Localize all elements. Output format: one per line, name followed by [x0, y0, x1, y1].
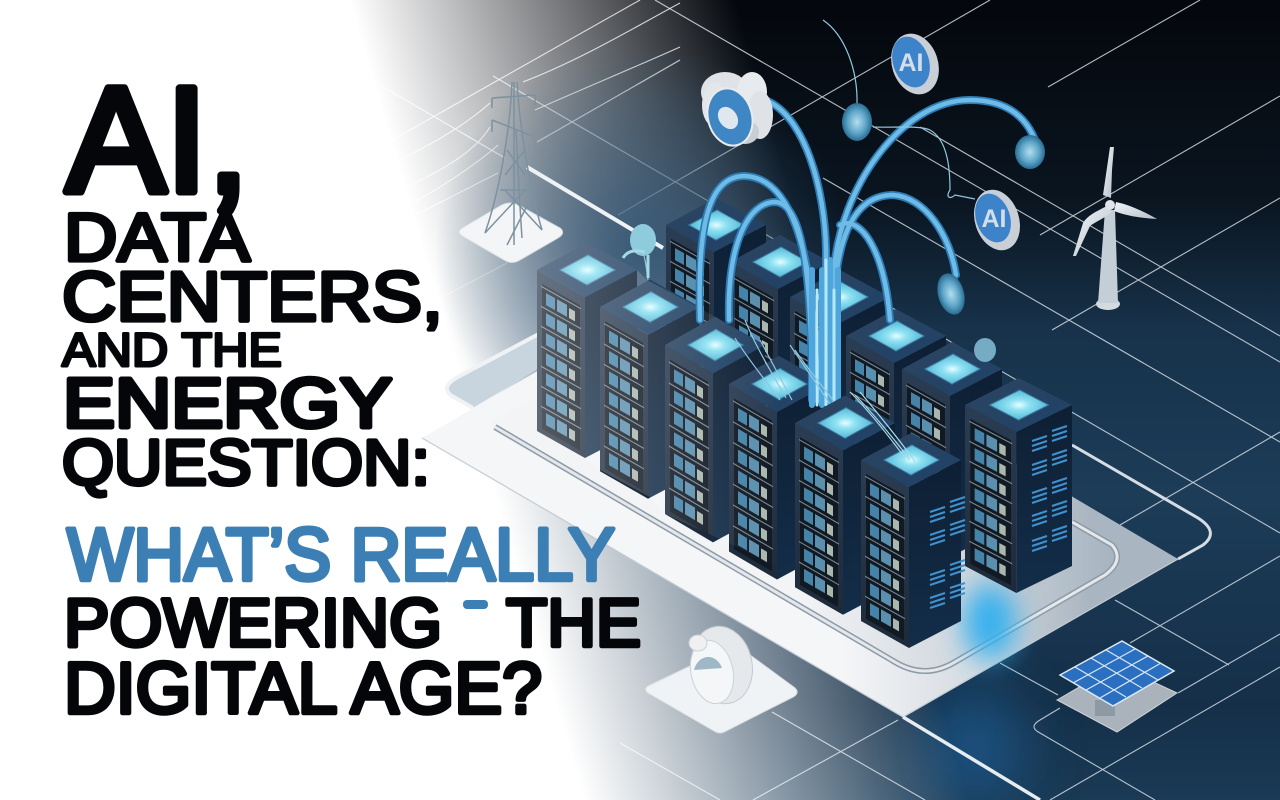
power lines	[380, 0, 680, 233]
device on pad	[646, 621, 797, 733]
server rack: back row 4	[846, 309, 946, 524]
title line: DATA: DATA	[64, 200, 251, 276]
rounded rim: upper-right	[1072, 445, 1210, 559]
AI badge: lower: AI	[982, 205, 1006, 233]
transmission edge line	[527, 167, 663, 248]
cables into front rack	[850, 392, 915, 462]
title line: CENTERS,: CENTERS,	[62, 258, 443, 336]
server rack: front row 2	[600, 279, 700, 499]
server rack: back row 6 with vents	[965, 378, 1072, 593]
raised tray	[491, 385, 1117, 671]
blue dash	[463, 600, 488, 609]
glass orb connectors	[623, 103, 1045, 362]
thick floor line	[903, 717, 1040, 800]
server rack: back row 1	[666, 198, 766, 413]
server rack: front row 3	[665, 317, 765, 542]
AI badge: upper: AI	[898, 49, 924, 77]
server rack: back row 5	[902, 342, 1002, 557]
thin cables	[640, 20, 975, 420]
mid blue tone	[435, 45, 845, 455]
solar panel	[1057, 641, 1177, 732]
title line: AND THE: AND THE	[62, 323, 282, 376]
title line: AI,: AI,	[66, 56, 249, 224]
AI badge: lower	[966, 184, 1028, 256]
server rack: front row 1	[537, 243, 637, 458]
subtitle line: DIGITAL AGE?: DIGITAL AGE?	[64, 649, 542, 729]
title	[62, 56, 641, 729]
rounded rim: left corner	[447, 320, 565, 408]
grid lines	[437, 0, 1280, 800]
server rack: back row 2	[730, 235, 830, 450]
server rack: back row 3	[790, 270, 890, 485]
blue tray glow	[964, 584, 1016, 660]
fibre tube bundle	[700, 100, 1035, 405]
cloud connector icon	[701, 72, 773, 151]
subtitle line: WHAT'S REALLY: WHAT’S REALLY	[67, 513, 615, 596]
title line: QUESTION:: QUESTION:	[62, 426, 430, 498]
plate lower edges	[422, 438, 1178, 717]
AI badge: upper	[884, 27, 946, 101]
pale wash over left racks	[537, 243, 780, 568]
white floor plate	[422, 277, 1178, 717]
subtitle line: POWERING: POWERING	[64, 585, 442, 661]
dark blue floor glow	[925, 690, 1025, 800]
power-line pylon on pad	[459, 82, 563, 262]
server rack: front row 6 with vents	[861, 433, 965, 648]
server rack: front row 5	[795, 395, 895, 615]
wind turbine	[1073, 147, 1157, 310]
server rack: front row 4	[729, 356, 829, 580]
title line: ENERGY: ENERGY	[63, 364, 392, 442]
subtitle word: THE: THE	[506, 585, 641, 661]
